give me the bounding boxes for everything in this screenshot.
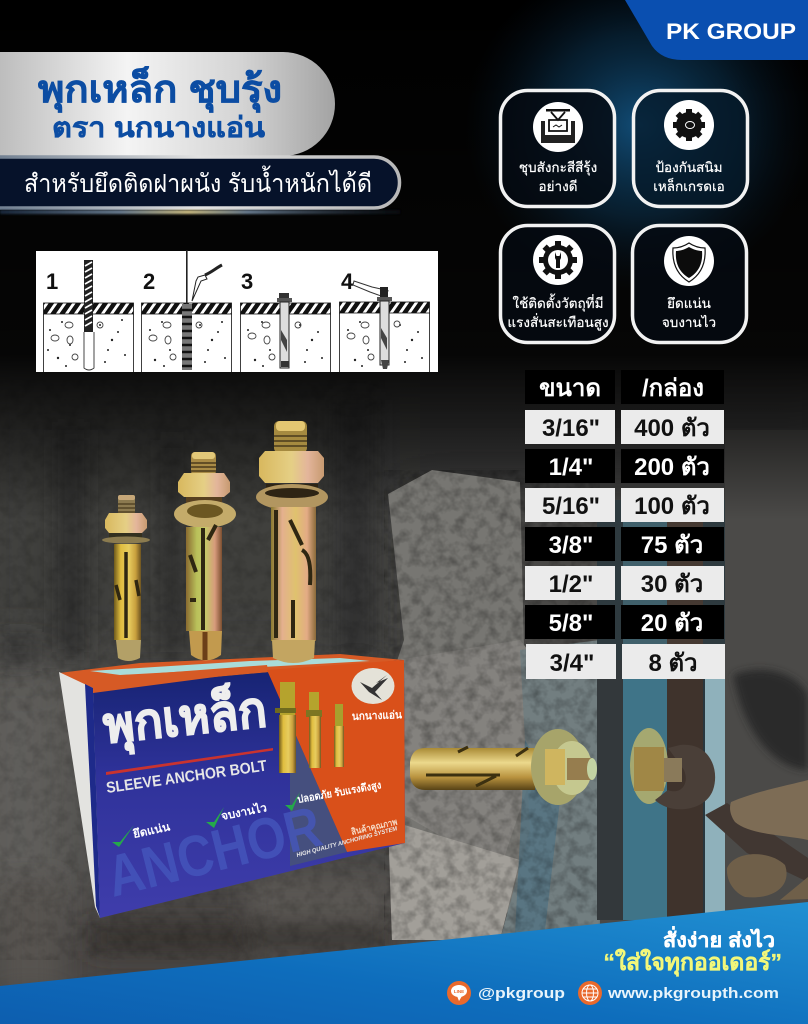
icon: gear (664, 100, 714, 150)
card: rust protection: ป้องกันสนิม (655, 160, 723, 175)
box orange panel (267, 660, 405, 852)
card: firm fixing: จบงานไว (662, 315, 716, 330)
box logo: swallow (352, 668, 394, 704)
icon: globe (578, 981, 602, 1005)
header tab: PK GROUP: PK GROUP (666, 19, 796, 44)
row 3/8: 75 ตัว (641, 532, 703, 559)
product box (59, 654, 405, 918)
header tab: PK GROUP (625, 0, 808, 60)
box quality text: สินค้าคุณภาพ (350, 817, 399, 838)
row 5/8: 20 ตัว (641, 610, 703, 637)
footer banner (0, 902, 808, 1024)
title pill (0, 52, 335, 156)
row 1/4: 200 ตัว (634, 454, 710, 481)
step 2: clean hole (143, 250, 222, 370)
step 1: drill: 1 (46, 269, 58, 294)
table header (525, 370, 724, 404)
title: brand line: ตรา นกนางแอ่น (52, 112, 265, 143)
step 2: clean hole: 2 (143, 269, 155, 294)
row 5/16: 5/16" (542, 493, 600, 520)
card: rust protection (634, 90, 748, 206)
feature cards (500, 90, 748, 342)
box watermark: ANCHOR (100, 794, 328, 910)
table header: ขนาด (539, 375, 601, 402)
row 3/4 (526, 644, 725, 679)
icon: LINE (447, 981, 471, 1005)
steel column (597, 500, 725, 920)
wrench tightening second anchor (630, 728, 808, 882)
step 3: insert anchor: 3 (241, 269, 253, 294)
product bolts (102, 421, 328, 663)
product box: HIGH QUALITY ANCHORING SYSTEM (296, 826, 399, 859)
medium bolt (174, 452, 236, 660)
website: www.pkgroupth.com (607, 986, 779, 1002)
card: vibration resistant: แรงสั่นสะเทือนสูง (507, 313, 609, 331)
step 4: tighten nut (341, 269, 392, 369)
row 5/16 (525, 488, 724, 522)
concrete pebbles (51, 321, 400, 360)
row 5/8 (525, 605, 724, 639)
line handle: @pkgroup (478, 986, 565, 1002)
row 3/16: 3/16" (542, 415, 600, 442)
card: rainbow zinc plating: ชุบสังกะสีสีรุ้ง (519, 160, 597, 176)
row 3/8 (525, 527, 724, 561)
box benefit ticks (112, 779, 382, 847)
step 3: insert anchor (241, 269, 292, 368)
installation steps diagram (36, 250, 438, 372)
box small bolts (275, 682, 344, 773)
box benefit ticks: ยึดแน่น (132, 820, 171, 841)
row 1/2: 1/2" (549, 571, 593, 598)
box subtitle: SLEEVE ANCHOR BOLT (105, 758, 268, 797)
icon: LINE: LINE (454, 989, 464, 994)
card: firm fixing: ยึดแน่น (667, 296, 711, 311)
large bolt (256, 421, 328, 663)
footer banner: “ใส่ใจทุกออเดอร์” (603, 948, 782, 977)
size and quantity table (525, 370, 725, 679)
card: vibration resistant (500, 226, 614, 342)
card: rainbow zinc plating (500, 90, 614, 206)
row 1/4: 1/4" (549, 454, 593, 481)
box benefit ticks: ปลอดภัย รับแรงดึงสูง (296, 779, 382, 807)
row 3/8: 3/8" (549, 532, 593, 559)
row 3/16 (525, 410, 724, 444)
subtitle pill (0, 157, 400, 214)
box brand text: นกนางแอ่น (352, 709, 403, 723)
box benefit ticks: จบงานไว (220, 800, 268, 823)
card: rust protection: เหล็กเกรดเอ (653, 177, 725, 194)
row 3/4: 3/4" (550, 650, 594, 677)
step 1: drill (46, 260, 94, 370)
card: vibration resistant: ใช้ติดตั้งวัตถุที่มี (513, 293, 603, 312)
box red line (106, 748, 273, 775)
title: main line: พุกเหล็ก ชุบรุ้ง (38, 66, 282, 113)
box title: พุกเหล็ก (100, 678, 270, 757)
icon: plating tank (533, 102, 583, 152)
row 1/2 (525, 566, 724, 600)
row 5/16: 100 ตัว (634, 493, 710, 520)
row 1/2: 30 ตัว (641, 571, 703, 598)
row 1/4 (525, 449, 724, 483)
card: rainbow zinc plating: อย่างดี (539, 179, 577, 194)
row 3/4: 8 ตัว (648, 650, 698, 677)
box side (59, 672, 100, 918)
concrete speckles (47, 319, 423, 367)
step band: hatched wall surface (44, 302, 430, 372)
footer slogan: สั่งง่าย ส่งไว (663, 925, 775, 952)
icon: shield (664, 236, 714, 286)
box front (93, 660, 405, 918)
icon: wrench in gear (533, 235, 583, 285)
work gloves (727, 780, 808, 900)
anchor bolt installed in wall (410, 729, 597, 805)
box top (59, 654, 404, 688)
subtitle pill: สำหรับยึดติดฝาผนัง รับน้ำหนักได้ดี (24, 165, 372, 198)
card: firm fixing (632, 226, 746, 342)
row 5/8: 5/8" (549, 610, 593, 637)
concrete block (384, 470, 600, 940)
step 4: tighten nut: 4 (341, 269, 354, 294)
small bolt (102, 495, 150, 661)
table header: /กล่อง (642, 375, 704, 402)
row 3/16: 400 ตัว (634, 415, 710, 442)
